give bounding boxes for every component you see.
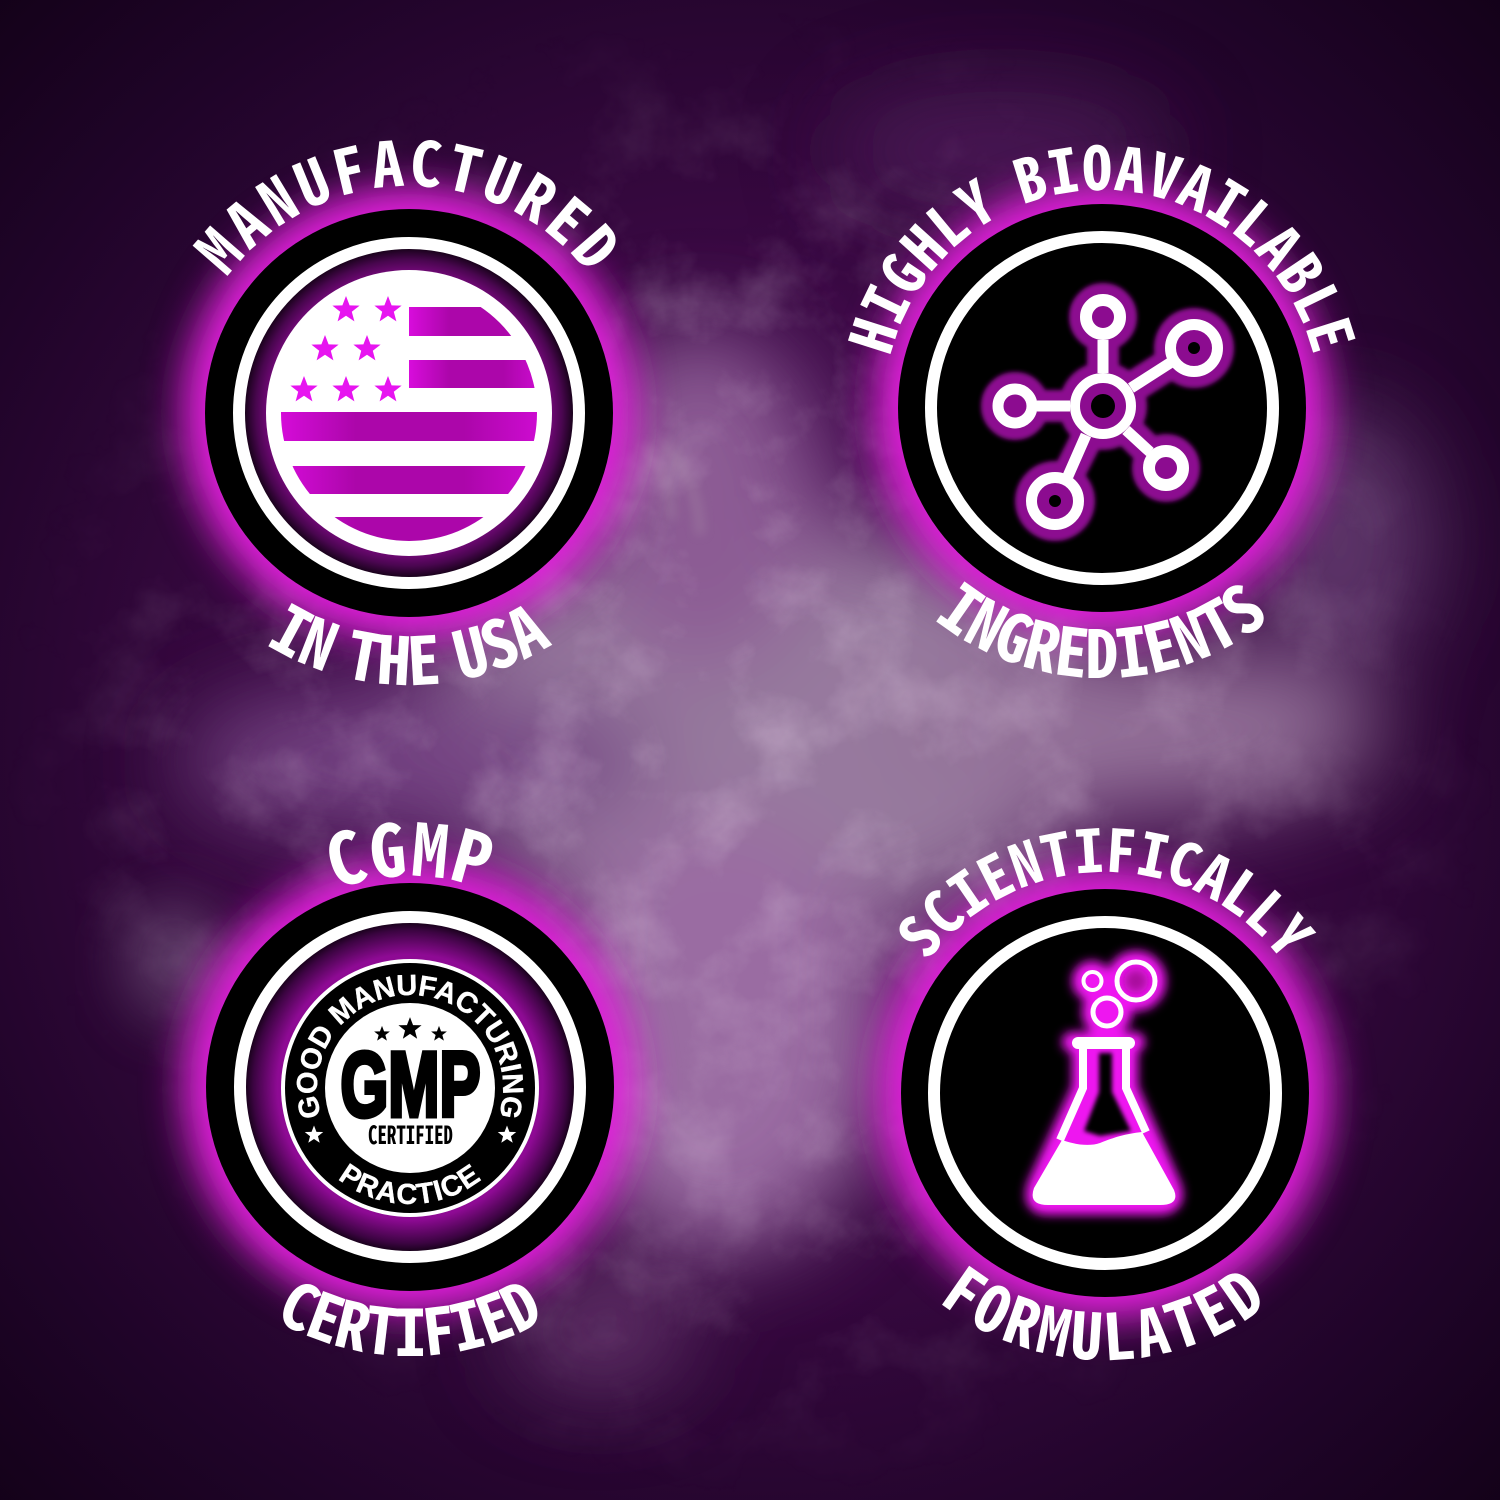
molecule icon: [998, 300, 1218, 524]
subheading: in the USA: IN THE USA: [268, 603, 552, 686]
heading: scientifically: SCIENTIFICALLY: [900, 828, 1316, 956]
heading: cGMP: CGMP: [329, 822, 492, 884]
black ring: [205, 209, 613, 617]
badge: cGMP certified: [153, 822, 664, 1356]
GMP seal: CERTIFIED: [368, 1116, 453, 1152]
black disc: [901, 889, 1309, 1297]
badge: scientifically formulated: [854, 828, 1363, 1360]
white ring: [240, 917, 580, 1257]
black disc: [898, 204, 1306, 612]
glow: [876, 182, 1328, 634]
subheading: ingredients: INGREDIENTS: [936, 581, 1264, 678]
inner gradient disc: [240, 917, 580, 1257]
badge: manufactured in the USA: [152, 140, 661, 686]
inner gradient disc: [239, 243, 579, 583]
glow: [184, 861, 636, 1313]
GMP seal: GMP: [340, 1034, 480, 1136]
black ring: [206, 883, 614, 1291]
heading: highly bioavailable: HIGHLY BIOAVAILABLE: [848, 144, 1356, 354]
glow: [879, 867, 1331, 1319]
badge: highly bioavailable ingredients: [846, 144, 1359, 678]
GMP seal: GOOD MANUFACTURING: [296, 974, 524, 1118]
flag icon: [266, 270, 552, 556]
white ring: [934, 922, 1276, 1264]
GMP seal: [281, 959, 539, 1217]
flask icon: [1033, 961, 1175, 1205]
white ring: [931, 237, 1273, 579]
glow: [183, 187, 635, 639]
white ring: [239, 243, 579, 583]
subheading: formulated: FORMULATED: [942, 1266, 1260, 1360]
heading: manufactured: MANUFACTURED: [192, 140, 616, 276]
subheading: certified: CERTIFIED: [283, 1284, 538, 1356]
GMP seal: PRACTICE: [338, 1163, 482, 1204]
